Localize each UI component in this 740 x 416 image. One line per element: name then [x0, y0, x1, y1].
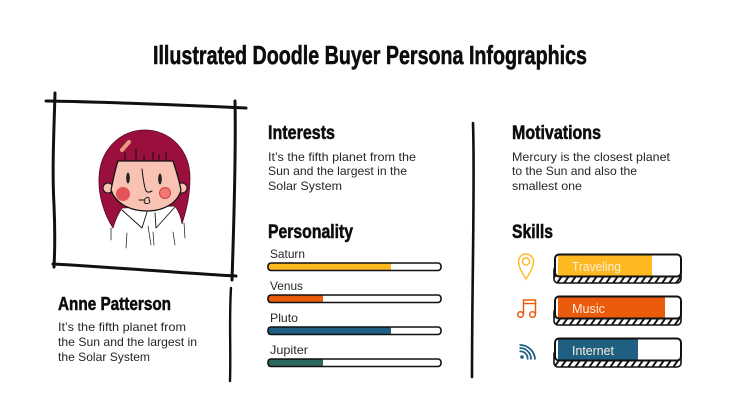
motivations: Motivations: [512, 123, 601, 144]
persona name and description: It’s the fifth planet from: [58, 320, 186, 334]
skill bar: Music: [554, 296, 681, 325]
divider center: [472, 123, 474, 377]
bar: Jupiter: [268, 343, 441, 366]
interests: Sun and the largest in the: [268, 164, 407, 178]
skills: [512, 221, 681, 367]
divider left: [230, 288, 231, 381]
motivations: [512, 123, 671, 193]
skill bar: Traveling: [554, 254, 681, 283]
persona name and description: the Solar System: [58, 350, 150, 364]
bar: Saturn: [268, 247, 441, 270]
bar: Pluto: [268, 311, 441, 334]
bar: Venus: [268, 279, 441, 302]
portrait panel: [46, 93, 246, 280]
illustration: woman with red hair: [99, 130, 190, 248]
persona name and description: [58, 293, 197, 364]
sketched frame: [46, 93, 246, 280]
interests: It’s the fifth planet from the: [268, 150, 416, 164]
bar: Pluto: Pluto: [270, 311, 298, 325]
bar: Venus: Venus: [270, 279, 303, 293]
title: Illustrated Doodle Buyer Persona Infographics: [153, 40, 587, 70]
motivations: smallest one: [512, 179, 582, 193]
motivations: Mercury is the closest planet: [512, 150, 671, 164]
persona name and description: the Sun and the largest in: [58, 335, 197, 349]
skills: Skills: [512, 221, 553, 243]
interests: Interests: [268, 123, 335, 144]
persona name and description: Anne Patterson: [58, 293, 171, 314]
skill bar: Music: Music: [572, 302, 605, 316]
bar: Saturn: Saturn: [270, 247, 305, 261]
bar: Jupiter: Jupiter: [270, 343, 308, 357]
interests: [268, 123, 416, 193]
motivations: to the Sun and also the: [512, 164, 637, 178]
skill bar: Internet: [554, 338, 681, 367]
personality: [268, 221, 441, 366]
skill bar: Traveling: Traveling: [572, 260, 621, 274]
icon: wifi signal: [520, 345, 535, 360]
personality: Personality: [268, 221, 353, 243]
interests: Solar System: [268, 179, 342, 193]
icon: location pin: [518, 254, 534, 279]
icon: music note: [518, 300, 536, 317]
skill bar: Internet: Internet: [572, 344, 615, 358]
